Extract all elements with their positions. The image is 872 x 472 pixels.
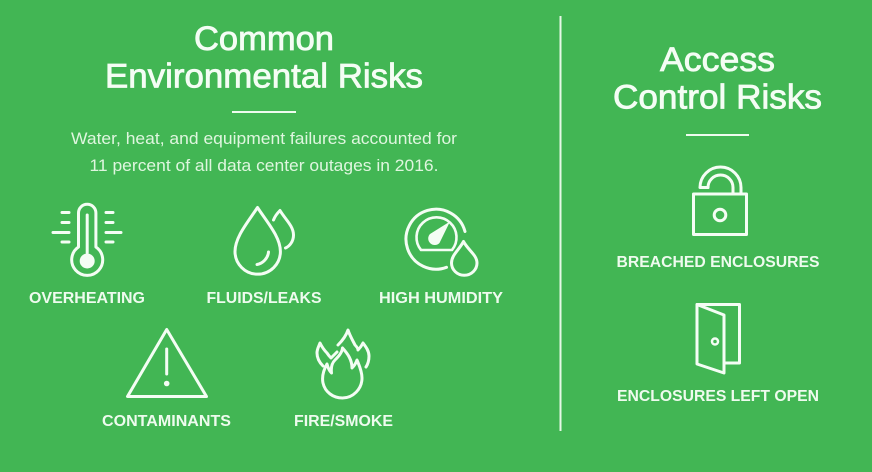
item: fire/smoke (294, 330, 393, 430)
label: enclosures left open: ENCLOSURES LEFT OPEN (617, 388, 819, 405)
item: contaminants (102, 330, 231, 430)
icon: open door (697, 304, 740, 373)
heading: common environmental risks: Environmental Risks (105, 58, 423, 96)
heading: access control risks (613, 41, 822, 116)
label: contaminants: CONTAMINANTS (102, 413, 231, 430)
label: high humidity: HIGH HUMIDITY (379, 290, 503, 307)
icon: thermometer (53, 204, 121, 275)
label: fire/smoke: FIRE/SMOKE (294, 413, 393, 430)
label: breached enclosures: BREACHED ENCLOSURES (616, 254, 820, 271)
label: fluids/leaks: FLUIDS/LEAKS (206, 290, 322, 307)
icon: warning triangle (128, 330, 206, 396)
intro text: Water, heat, and equipment failures accounted for (71, 129, 457, 148)
heading: access control risks: Control Risks (613, 78, 822, 116)
icon: gauge with drop (406, 209, 477, 275)
item: enclosures left open (617, 304, 819, 405)
icon: water drops (235, 208, 294, 274)
item: overheating (29, 204, 145, 307)
item: high humidity (379, 209, 503, 307)
heading: common environmental risks (105, 20, 423, 96)
icon: flames (317, 330, 369, 398)
item: breached enclosures (616, 167, 820, 271)
label: overheating: OVERHEATING (29, 290, 145, 307)
heading: common environmental risks: Common (194, 20, 334, 58)
item: fluids/leaks (206, 208, 322, 307)
intro text (71, 129, 457, 175)
panel: common environmental risks (29, 20, 503, 430)
intro text: 11 percent of all data center outages in 2016. (90, 156, 439, 175)
panel: access control risks (613, 41, 822, 405)
icon: open padlock (694, 167, 746, 234)
heading: access control risks: Access (660, 41, 775, 79)
